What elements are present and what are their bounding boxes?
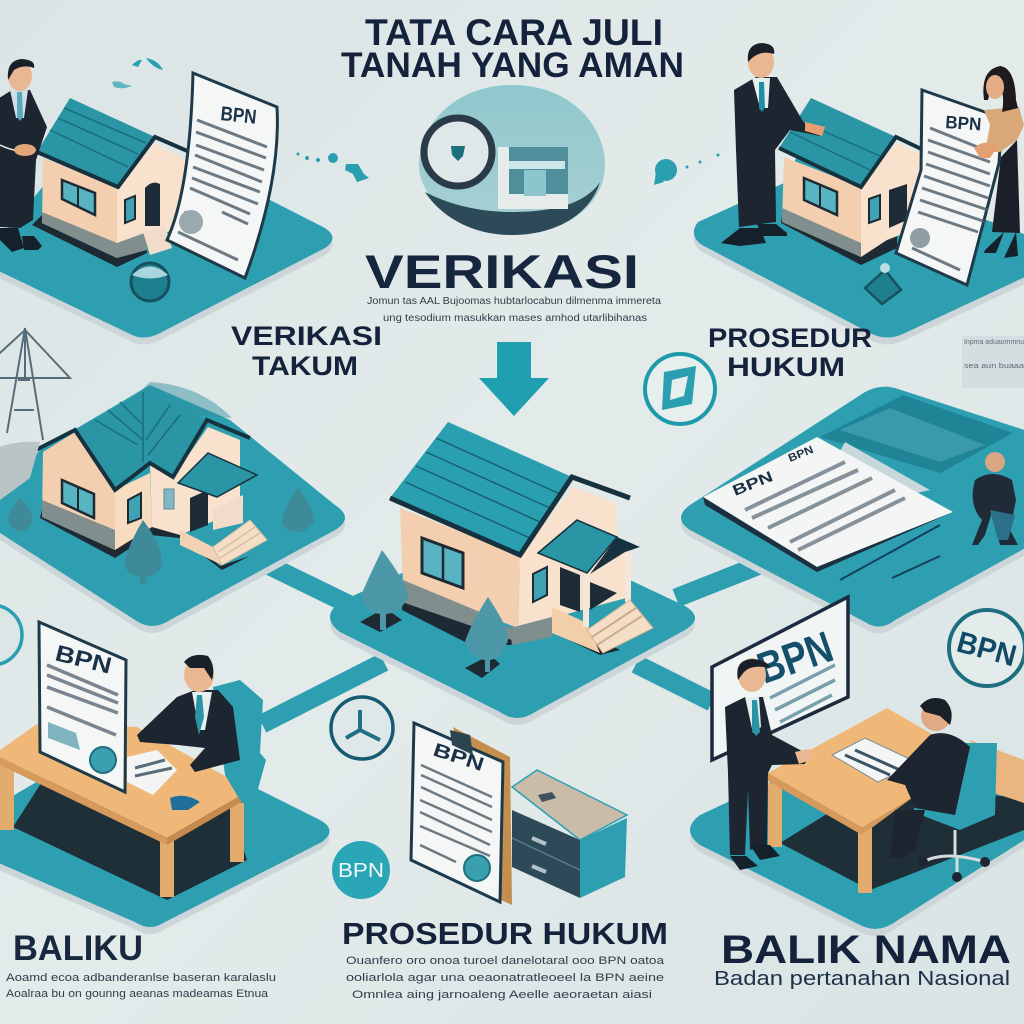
meeting table <box>768 708 1024 893</box>
verifikasi description: ung tesodium masukkan mases amhod utarlibihanas <box>383 312 647 324</box>
document: BPN <box>167 73 277 278</box>
prosedur description: Ouanfero oro onoa turoel danelotaral ooo BPN oatoa <box>346 955 665 967</box>
document: open newspaper <box>703 437 953 572</box>
document: BPN: BPN <box>945 112 982 135</box>
badge: BPN teal: BPN <box>338 860 384 882</box>
icon: bush <box>282 488 314 532</box>
baliku description <box>6 972 276 1000</box>
person: left agent <box>0 59 47 252</box>
label: prosedur hukum bottom: PROSEDUR HUKUM <box>342 916 668 951</box>
panel: bottom-right meeting <box>690 597 1024 929</box>
icon: BPN seal <box>949 610 1024 686</box>
icon: clock emblem <box>331 697 393 759</box>
baliku description: Aoamd ecoa adbanderanlse baseran karalaslu <box>6 972 276 984</box>
decorative faint chart top right <box>962 336 1024 388</box>
arrow: down <box>479 342 549 416</box>
title <box>341 12 684 85</box>
label: verifikasi takum <box>231 321 382 381</box>
icon: magnifier lens emblem <box>419 85 605 235</box>
prosedur description: Omnlea aing jarnoaleng Aeelle aeoraetan aiasi <box>352 989 652 1001</box>
label: prosedur hukum <box>708 323 872 382</box>
panel: mid-right document <box>681 387 1024 627</box>
verifikasi description: Jomun tas AAL Bujoomas hubtarlocabun dilmenma immereta <box>367 295 661 307</box>
document: open newspaper: BPN <box>787 444 815 465</box>
connector bars between platforms <box>262 564 762 724</box>
icon: lens on platform <box>131 263 169 301</box>
label: prosedur hukum: PROSEDUR <box>708 323 872 353</box>
chair <box>913 743 997 882</box>
person: agent in suit <box>721 43 825 246</box>
label: prosedur hukum: HUKUM <box>727 352 845 382</box>
prosedur description <box>346 955 665 1001</box>
heading: verifikasi: VERIKASI <box>365 245 639 298</box>
label: verifikasi takum: TAKUM <box>252 351 358 381</box>
document: BPN poster <box>39 622 126 792</box>
verifikasi description <box>367 295 661 324</box>
panel: centre house <box>330 422 695 718</box>
title: TANAH YANG AMAN <box>341 46 684 85</box>
label: baliku <box>6 929 276 1000</box>
title: TATA CARA JULI <box>365 12 663 53</box>
decorative faint chart top right: sea aun buaaa <box>964 363 1024 370</box>
icon: prosedur seal <box>645 354 715 424</box>
person: seated officer <box>127 655 266 810</box>
person: seated client <box>887 698 970 858</box>
person: woman <box>974 66 1024 258</box>
document: BPN certificate <box>411 723 512 905</box>
subtitle: badan pertanahan nasional: Badan pertanahan Nasional <box>714 968 1010 990</box>
icon: BPN seal: BPN <box>953 626 1020 673</box>
icon: power tower <box>0 328 70 500</box>
label: prosedur hukum bottom <box>342 916 668 1001</box>
icon: lens on platform <box>865 263 901 304</box>
document: BPN poster: BPN <box>53 640 114 679</box>
document: BPN certificate: BPN <box>430 740 486 776</box>
panel: top-left house and document <box>0 59 332 338</box>
icon: tree <box>124 520 162 584</box>
badge: BPN teal <box>332 841 390 899</box>
document: BPN: BPN <box>219 103 258 129</box>
icon: tree right <box>465 597 508 678</box>
label: balik nama <box>714 928 1011 990</box>
panel: top-right house, agents and document <box>694 43 1024 338</box>
document: open newspaper: BPN <box>730 468 775 500</box>
panel: bottom-left desk <box>0 622 330 927</box>
panel: bottom-centre document and cabinet <box>411 723 627 905</box>
icon: tree left <box>360 550 408 632</box>
document: BPN <box>896 90 1002 285</box>
label: balik nama: BALIK NAMA <box>721 928 1011 972</box>
screen: BPN display: BPN <box>751 622 839 693</box>
icon: cabinet <box>512 770 627 898</box>
document on table <box>832 738 918 782</box>
label: baliku: BALIKU <box>13 929 143 968</box>
decorative dots near emblem <box>112 58 720 185</box>
decorative faint chart top right: Inpma aduaummnu <box>964 339 1024 346</box>
label: verifikasi takum: VERIKASI <box>231 321 382 351</box>
screen: BPN display <box>712 597 848 760</box>
panel: mid-left house <box>0 382 345 626</box>
baliku description: Aoalraa bu on gounng aeanas madeamas Etnua <box>6 988 269 1000</box>
person: seated reader <box>972 452 1018 545</box>
heading: verifikasi <box>365 245 661 324</box>
prosedur description: ooliarlola agar una oeaonatratleoeel la BPN aeine <box>346 972 664 984</box>
badge: partial emblem left edge <box>0 605 22 665</box>
person: standing agent <box>725 658 813 870</box>
